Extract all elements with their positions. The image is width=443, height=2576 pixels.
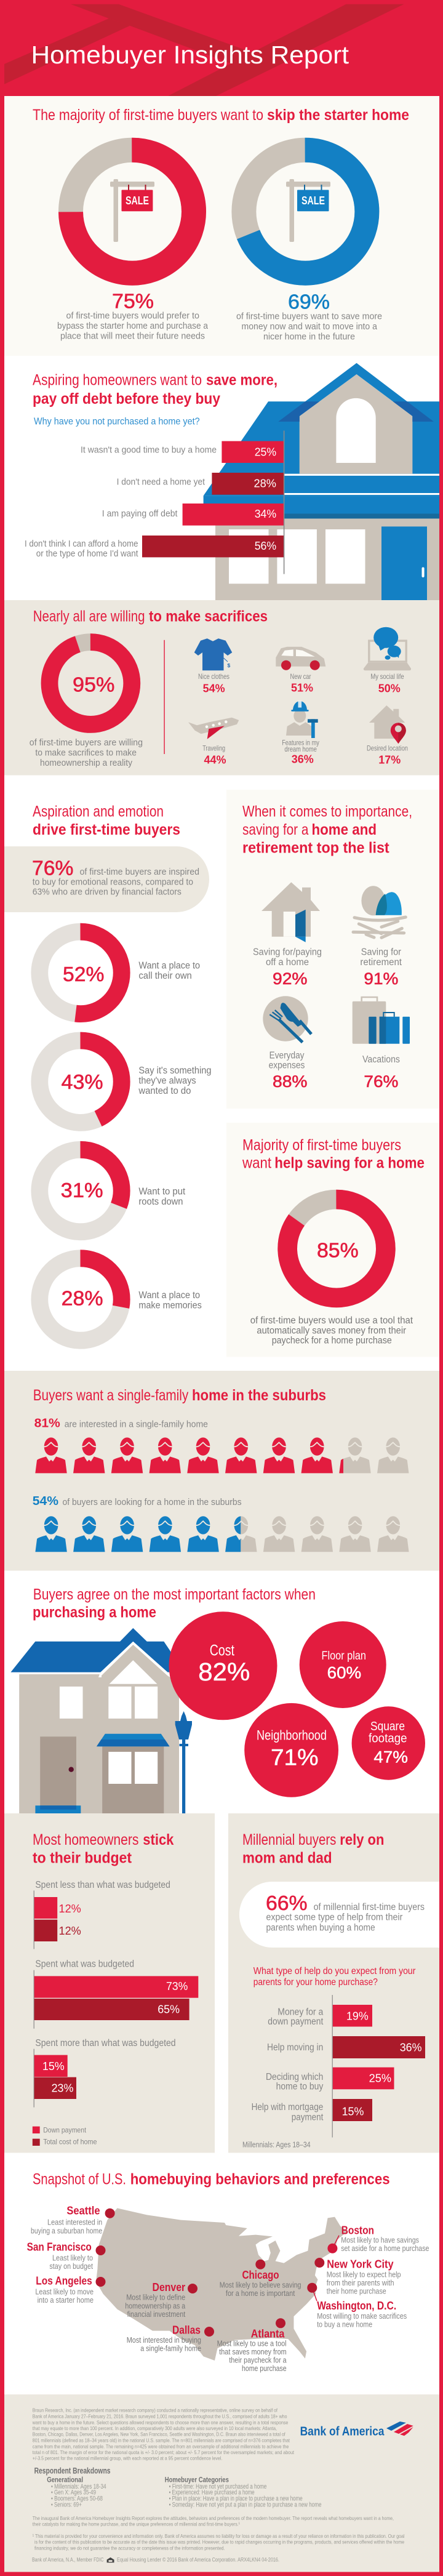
stat: 69%: nicer home in the future <box>263 331 355 342</box>
map pin: Washington, D.C.: to buy a new home <box>317 2320 372 2329</box>
bubble: floor plan 60%: Floor plan <box>321 1650 366 1663</box>
map pin: Denver: Most likely to define <box>126 2293 185 2302</box>
label: everyday expenses 88%: Everyday <box>269 1050 305 1061</box>
map pin: Seattle <box>31 2204 115 2235</box>
panel: home in the suburbs <box>4 1371 439 1571</box>
bar chart: type of help: 15% <box>342 2105 364 2117</box>
label: saving for home 92%: Saving for/paying <box>253 947 322 958</box>
stat: 75%: bypass the starter home and purchase a <box>57 321 209 331</box>
legal line with equal housing icon: Equal Housing Lender © 2016 Bank of America Corporation. ARX4LKN4 04-2016. <box>117 2557 279 2563</box>
map pin: Los Angeles: into a starter home <box>38 2295 94 2305</box>
map pin: San Francisco <box>27 2241 106 2271</box>
label: everyday expenses 88%: expenses <box>269 1060 305 1070</box>
donut chart: 69% <box>244 150 367 273</box>
heading: Aspiration and emotion <box>33 803 164 821</box>
map pin: New York City: Most likely to expect help <box>327 2269 401 2279</box>
label: make memories: Want a place to <box>138 1290 200 1301</box>
bar chart: type of help: Deciding which <box>266 2072 323 2082</box>
disclaimer: financing industry, we do not guarantee the accuracy or completeness of the information presented. <box>34 2545 225 2551</box>
stat: 81% <box>34 1417 208 1430</box>
label: saving for retirement 91% <box>360 947 402 988</box>
icon: blue sale sign <box>286 179 330 242</box>
panel: help saving for a home <box>226 1123 439 1357</box>
map pin: New York City: their home purchase <box>327 2287 386 2296</box>
label: roots down <box>138 1187 186 1207</box>
bar chart: type of help: home to buy <box>276 2082 324 2092</box>
map pin: San Francisco: Least likely to <box>52 2253 93 2262</box>
map pin: Atlanta: home purchase <box>242 2364 287 2373</box>
respondent breakdowns: • Experienced: Have purchased a home <box>169 2489 255 2497</box>
heading <box>33 1387 326 1404</box>
label: desired location: 17% <box>378 753 401 766</box>
donut chart: 75% <box>71 150 194 273</box>
stat text: of first-time buyers are willing <box>30 737 143 748</box>
map marker lines <box>312 2236 339 2301</box>
methodology text: +/-3.5 percent for the national millennial group, with each reported at a 95 percent confidence level. <box>33 2455 222 2462</box>
heading: homebuying behaviors and preferences <box>130 2170 390 2188</box>
bar chart: type of help: 36% <box>400 2041 422 2053</box>
panel: stick to their budget <box>4 1813 215 2153</box>
donut chart: 28%: 28% <box>62 1286 103 1309</box>
heading: home in the suburbs <box>192 1387 326 1404</box>
map pin: Seattle: buying a suburban home <box>31 2226 102 2235</box>
map pin: Denver <box>125 2281 198 2319</box>
legend: Total cost of home <box>43 2138 97 2146</box>
legal line with equal housing icon: Bank of America, N.A., Member FDIC <box>32 2557 104 2563</box>
heading: Nearly all are willing <box>33 608 145 625</box>
label: new car <box>290 672 313 694</box>
legal line with equal housing icon <box>32 2557 279 2563</box>
respondent breakdowns <box>34 2466 321 2508</box>
bubble: floor plan 60% <box>300 1621 386 1708</box>
panel: save more, pay off debt <box>4 356 439 600</box>
stat text <box>30 737 143 768</box>
bar chart: reasons not purchased: I don't think I can afford a home <box>25 539 138 549</box>
bubble: cost 82%: Cost <box>210 1642 234 1659</box>
icon: red sale sign <box>110 179 154 242</box>
label: make memories <box>138 1290 202 1310</box>
stat: 69%: 69% <box>288 291 330 313</box>
label: everyday expenses 88% <box>269 1050 308 1091</box>
subheading question: What type of help do you expect from your <box>253 1966 416 1976</box>
heading: Most homeowners <box>33 1831 138 1848</box>
stat text <box>250 1315 413 1346</box>
label: roots down: Want to put <box>138 1187 186 1197</box>
heading: skip the starter home <box>267 106 409 124</box>
map pin: Chicago: Most likely to believe saving <box>220 2281 301 2290</box>
map pin: San Francisco: San Francisco <box>27 2241 92 2253</box>
bar chart: spent budgeted <box>34 1959 198 2029</box>
label: features in my dream home <box>282 738 319 765</box>
logo: Bank of America: Bank of America <box>300 2424 385 2438</box>
heading: to their budget <box>33 1849 132 1866</box>
heading <box>242 1831 384 1866</box>
methodology text: came from the main, national sample. The remaining n=425 were obtained from an oversample of additional millennials to achieve the <box>33 2443 289 2449</box>
icon: blue sale sign: SALE <box>301 194 325 207</box>
bar chart: type of help: payment <box>292 2112 324 2122</box>
stat: 75%: of first-time buyers would prefer to <box>66 310 199 321</box>
label: traveling: Traveling <box>202 744 225 752</box>
methodology text: 801 millennials (defined as 18–34 years old) in the national U.S. sample. The n=801 millennials are comprised of n=376 completes that <box>33 2437 290 2443</box>
heading: Buyers want a single-family <box>33 1387 189 1404</box>
bar chart: spent less: 12% <box>59 1924 81 1937</box>
footnote: age range: Millennials: Ages 18–34 <box>242 2141 311 2149</box>
bubble: square footage 47% <box>352 1706 425 1780</box>
heading <box>242 1137 425 1172</box>
methodology text: that may equate to more than 100 percent. In addition, comparatively 300 adults were also surveyed in 10 local markets: Atlanta, <box>33 2425 277 2431</box>
donut chart: 31%: 31% <box>61 1179 103 1202</box>
map pin: Atlanta: their paycheck for a <box>229 2355 287 2364</box>
label: make memories: make memories <box>138 1300 202 1310</box>
label: vacations 76% <box>362 1054 400 1091</box>
bubble: neighborhood 71%: Neighborhood <box>257 1728 327 1743</box>
callout: 66%: of millennial first-time buyers <box>314 1902 425 1912</box>
map pin: Denver: Denver <box>153 2281 185 2293</box>
map pin: Atlanta: Atlanta <box>251 2327 285 2340</box>
label: vacations 76%: Vacations <box>362 1054 400 1065</box>
icon: t-shirt: $ <box>228 662 230 668</box>
donut chart: 52%: 52% <box>63 963 104 985</box>
panel: aspiration and emotion <box>4 803 212 1341</box>
header banner <box>4 4 404 96</box>
heading: drive first-time buyers <box>33 821 180 838</box>
heading: want <box>242 1155 271 1172</box>
heading: save more, <box>206 372 277 389</box>
map pin: Dallas <box>127 2324 214 2353</box>
pictogram: 81 percent row <box>35 1437 409 1473</box>
bar chart: type of help: Help moving in <box>267 2042 323 2053</box>
label: saving for retirement 91%: 91% <box>364 969 398 988</box>
label: saving for home 92% <box>253 947 322 988</box>
heading: to make sacrifices <box>149 608 268 625</box>
map pin: Los Angeles <box>35 2275 106 2305</box>
map pin: Los Angeles: Los Angeles <box>36 2275 92 2287</box>
respondent breakdowns: Generational <box>47 2476 83 2484</box>
heading <box>242 803 412 857</box>
donut chart: 43% <box>39 1040 122 1123</box>
bar chart: spent budgeted: 65% <box>158 2002 180 2015</box>
bar chart: reasons not purchased <box>25 431 284 574</box>
bar chart: type of help: 19% <box>346 2009 369 2022</box>
bar chart: spent more <box>34 2038 176 2108</box>
bar chart: reasons not purchased: 56% <box>255 539 276 552</box>
callout: 66%: 66% <box>266 1892 308 1914</box>
icon: car <box>276 647 325 670</box>
callout: 76%: of first-time buyers are inspired <box>80 867 199 877</box>
respondent breakdowns: • Boomers: Ages 50-68 <box>51 2495 103 2503</box>
legend: Down payment <box>43 2126 87 2135</box>
heading <box>33 1586 316 1621</box>
stat: 75% <box>57 290 209 341</box>
label: call their own: Want a place to <box>138 960 200 971</box>
heading <box>33 1831 174 1866</box>
map pin: Boston: Most likely to have savings <box>341 2236 419 2245</box>
bar chart: reasons not purchased: 34% <box>255 507 276 520</box>
subheading question: parents for your home purchase? <box>253 1977 378 1988</box>
label: desired location <box>367 744 408 766</box>
bar chart: type of help: Money for a <box>277 2007 324 2018</box>
heading: Majority of first-time buyers <box>242 1137 401 1154</box>
callout: 66%: expect some type of help from their <box>266 1912 402 1923</box>
stat: 81%: are interested in a single-family home <box>65 1419 208 1430</box>
bar chart: reasons not purchased: I don't need a home yet <box>117 478 205 488</box>
map pin: Chicago: Chicago <box>242 2269 279 2281</box>
map pin: Dallas: Most interested in buying <box>127 2335 201 2345</box>
respondent breakdowns: • Someday: Have not yet put a plan in place to purchase a new home <box>169 2501 321 2508</box>
stat: 81%: 81% <box>34 1417 60 1430</box>
map pin: Chicago: for a home is important <box>226 2289 295 2298</box>
stat: 75%: place that will meet their future needs <box>60 331 205 341</box>
map pin: Chicago <box>220 2260 301 2298</box>
callout: 66%: parents when buying a home <box>266 1922 375 1933</box>
bar chart: type of help: Help with mortgage <box>252 2102 323 2113</box>
heading <box>33 372 277 407</box>
heading: The majority of first-time buyers want to <box>33 106 263 124</box>
heading: stick <box>143 1831 174 1848</box>
bar chart: spent less: 12% <box>59 1902 81 1915</box>
respondent breakdowns: • First-time: Have not yet purchased a home <box>169 2483 266 2490</box>
header chevron pattern <box>4 4 404 96</box>
bar chart: type of help: down payment <box>268 2016 324 2027</box>
callout: 76%: to buy for emotional reasons, compared to <box>33 877 193 887</box>
bubble: square footage 47%: 47% <box>373 1747 408 1766</box>
map pin: San Francisco: stay on budget <box>49 2261 93 2271</box>
map pin: Washington, D.C.: Most willing to make sacrifices <box>317 2311 407 2321</box>
map pin: New York City: New York City <box>327 2258 394 2271</box>
bar chart: reasons not purchased: I am paying off debt <box>102 509 177 519</box>
map pin: Washington, D.C. <box>307 2283 407 2329</box>
icon: t-shirt <box>194 638 232 670</box>
heading: saving for a <box>242 821 308 838</box>
label: features in my dream home: Features in my <box>282 738 319 747</box>
panel: saving importance <box>226 790 439 1109</box>
donut chart: 28% <box>39 1258 122 1341</box>
icon: house with location pin <box>369 705 406 744</box>
label: saving for retirement 91%: Saving for <box>361 947 401 958</box>
callout: 76%: 63% who are driven by financial factors <box>33 887 182 897</box>
methodology text: total n of 801. The margin of error for the national quota is +/- 3.0 percent; about +/- 5.7 percent for the oversampled markets; and about <box>33 2449 295 2455</box>
label: always wanted to do <box>138 1065 212 1096</box>
map pin: Boston <box>327 2225 429 2253</box>
map of the united states <box>96 2208 348 2361</box>
donut chart: 85% <box>287 1200 386 1298</box>
label: always wanted to do: Say it's something <box>138 1065 212 1076</box>
panel: willing to make sacrifices <box>4 600 439 776</box>
label: saving for retirement 91%: retirement <box>360 957 402 968</box>
panel: u.s. snapshot <box>27 2170 429 2373</box>
label: vacations 76%: 76% <box>364 1072 398 1091</box>
report description <box>33 2515 394 2527</box>
label: call their own: call their own <box>138 971 192 981</box>
map pin: Seattle: Least interested in <box>47 2218 102 2227</box>
bubble: cost 82%: 82% <box>198 1658 250 1686</box>
legend <box>33 2126 97 2146</box>
bar chart: reasons not purchased: It wasn't a good time to buy a home <box>81 445 217 455</box>
label: new car: 51% <box>291 682 313 694</box>
label: saving for home 92%: off a home <box>266 957 309 968</box>
methodology text <box>32 2407 295 2462</box>
bar chart: reasons not purchased: or the type of home I'd want <box>36 549 138 559</box>
stat: 75%: 75% <box>112 290 154 313</box>
label: nice clothes: Nice clothes <box>198 672 229 681</box>
heading: Aspiring homeowners want to <box>33 372 202 389</box>
map pin: Los Angeles: Least likely to move <box>35 2287 94 2297</box>
map pin: Dallas: a single-family home <box>140 2344 201 2353</box>
bar chart: reasons not purchased: 25% <box>255 446 276 459</box>
donut chart: 95%: 95% <box>73 673 114 696</box>
stat: 69%: of first-time buyers want to save more <box>236 311 382 322</box>
methodology text: Braun Research, Inc. (an independent market research company) conducted a nationally representative, online survey on behalf of <box>33 2407 277 2413</box>
donut chart: 52% <box>39 932 122 1014</box>
bar chart: spent less: Spent less than what was budgeted <box>35 1880 170 1890</box>
label: new car: New car <box>290 672 311 681</box>
icon: laptop with speech bubbles <box>364 627 411 670</box>
title: Homebuyer Insights Report <box>31 41 349 69</box>
donut chart: 43%: 43% <box>62 1070 103 1093</box>
donut chart: 31% <box>39 1150 122 1232</box>
bubble: cost 82% <box>169 1611 277 1720</box>
label: saving for home 92%: 92% <box>273 969 308 988</box>
icon: red sale sign: SALE <box>126 194 149 207</box>
methodology text: Bank of America January 27–February 21, 2016. Braun surveyed 1,001 respondents throughout the U.S., comprised of adults 18+ who <box>33 2413 287 2419</box>
heading: Snapshot of U.S. <box>33 2170 126 2188</box>
stat: 69%: money now and wait to move into a <box>241 321 378 332</box>
icon: house with open door <box>261 882 320 942</box>
respondent breakdowns: • Millennials: Ages 18-34 <box>51 2483 106 2490</box>
bar chart: spent more: 15% <box>42 2060 65 2072</box>
bubble: neighborhood 71% <box>244 1703 338 1797</box>
icon: suitcases <box>353 997 410 1044</box>
bar chart: reasons not purchased: 28% <box>253 477 276 490</box>
icon: nest egg <box>353 886 405 937</box>
map pin: Atlanta: that saves money from <box>219 2347 287 2356</box>
bar chart: type of help: 25% <box>369 2072 391 2084</box>
map pin: Dallas: Dallas <box>172 2324 201 2336</box>
map pin: Denver: homeownership as a <box>125 2301 186 2310</box>
map pin: Atlanta: Most likely to use a tool <box>217 2338 287 2348</box>
stat: 54%: 54% <box>33 1495 58 1508</box>
label: call their own <box>138 960 200 981</box>
label: everyday expenses 88%: 88% <box>273 1072 308 1091</box>
heading <box>33 803 180 838</box>
panel: skip the starter home <box>4 96 439 356</box>
respondent breakdowns: • Plan in place: Have a plan in place to purchase a new home <box>169 2495 303 2503</box>
respondent breakdowns: Homebuyer Categories <box>165 2476 229 2484</box>
stat text: homeownership a reality <box>40 758 132 768</box>
label: nice clothes: 54% <box>203 683 225 695</box>
heading: Buyers agree on the most important factors when <box>33 1586 316 1603</box>
map pin: New York City: from their parents with <box>327 2278 394 2287</box>
label: nice clothes <box>198 672 229 695</box>
methodology text: want to buy a home in the future. Select questions allowed respondents to choose more than one answer, resulting in a total response <box>32 2419 289 2425</box>
bubble: floor plan 60%: 60% <box>327 1664 361 1682</box>
label: my social life <box>370 672 404 695</box>
label: features in my dream home: dream home <box>284 745 317 753</box>
bar chart: type of help <box>252 1995 425 2137</box>
label: always wanted to do: wanted to do <box>138 1086 191 1096</box>
stat text: paycheck for a home purchase <box>272 1336 392 1346</box>
map pin: Boston: Boston <box>341 2225 374 2237</box>
label: traveling: 44% <box>204 753 226 766</box>
panel: rely on mom and dad <box>228 1813 439 2153</box>
illustration: blue roof house <box>204 363 439 600</box>
label: traveling <box>202 744 226 766</box>
bar chart: spent more: Spent more than what was budgeted <box>35 2038 176 2048</box>
stat text: to make sacrifices to make <box>35 747 137 758</box>
map pin: Atlanta <box>217 2318 287 2373</box>
bubble: square footage 47%: Square <box>370 1720 405 1733</box>
label: my social life: 50% <box>378 683 401 695</box>
bar chart: spent more: 23% <box>52 2082 73 2095</box>
heading: mom and dad <box>242 1849 332 1866</box>
heading: retirement top the list <box>242 840 389 857</box>
stat text: of first-time buyers would use a tool that <box>250 1315 413 1326</box>
callout: 66% <box>239 1882 439 1948</box>
label: my social life: My social life <box>370 672 404 681</box>
bar chart: spent budgeted: 73% <box>166 1980 188 1992</box>
icon: construction worker <box>286 700 318 738</box>
panel: footer methodology <box>4 2394 439 2572</box>
callout: 76% <box>4 846 209 912</box>
heading: rely on <box>340 1831 384 1848</box>
respondent breakdowns: • Seniors: 69+ <box>51 2501 82 2508</box>
callout: 76%: 76% <box>32 857 73 880</box>
stat text: automatically saves money from their <box>257 1325 406 1336</box>
label: always wanted to do: they've always <box>138 1076 196 1086</box>
icon: airplane <box>188 718 239 739</box>
respondent breakdowns: • Gen X: Ages 35-49 <box>51 2489 96 2497</box>
icon: plate with fork and knife <box>263 996 311 1042</box>
bubble: neighborhood 71%: 71% <box>271 1744 319 1770</box>
map pin: Seattle: Seattle <box>66 2204 100 2217</box>
bubble: square footage 47%: footage <box>369 1732 407 1746</box>
methodology text: Boston, Chicago, Dallas, Denver, Los Angeles, New York, San Francisco, Seattle and Washington, D.C. Braun also interviewed a total of <box>33 2431 285 2438</box>
disclaimer <box>33 2533 405 2551</box>
subheading question: Why have you not purchased a home yet? <box>34 416 200 427</box>
label: features in my dream home: 36% <box>292 753 314 765</box>
donut chart: 95% <box>49 642 132 724</box>
heading: home and <box>311 821 377 838</box>
heading: When it comes to importance, <box>242 803 412 821</box>
illustration: house <box>10 1628 185 1813</box>
heading: pay off debt before they buy <box>33 390 220 407</box>
map pin: Denver: financial investment <box>127 2309 186 2319</box>
panel: most important factors <box>10 1586 425 1813</box>
stat: 54% <box>33 1495 242 1508</box>
heading: help saving for a home <box>274 1155 425 1172</box>
subheading question <box>253 1966 416 1988</box>
bar chart: spent budgeted: Spent what was budgeted <box>35 1959 134 1970</box>
respondent breakdowns: Respondent Breakdowns <box>34 2466 111 2475</box>
heading <box>33 608 268 625</box>
report description: their catalysts for making the home purchase, and the unique preferences of millennial and first-time buyers.¹ <box>33 2521 240 2527</box>
heading: Millennial buyers <box>242 1831 336 1848</box>
stat: 54%: of buyers are looking for a home in the suburbs <box>63 1497 242 1507</box>
stat: 69% <box>236 291 382 342</box>
map pin: New York City <box>314 2258 401 2296</box>
donut chart: 85%: 85% <box>317 1239 359 1262</box>
label: roots down: roots down <box>138 1197 183 1207</box>
heading: purchasing a home <box>33 1604 156 1621</box>
pictogram: 54 percent row <box>35 1516 409 1552</box>
heading <box>33 2170 390 2188</box>
icon: street lamp <box>175 1711 192 1813</box>
bar chart: spent less <box>34 1880 170 1949</box>
map pin: Washington, D.C.: Washington, D.C. <box>317 2300 396 2312</box>
label: desired location: Desired location <box>367 744 408 752</box>
